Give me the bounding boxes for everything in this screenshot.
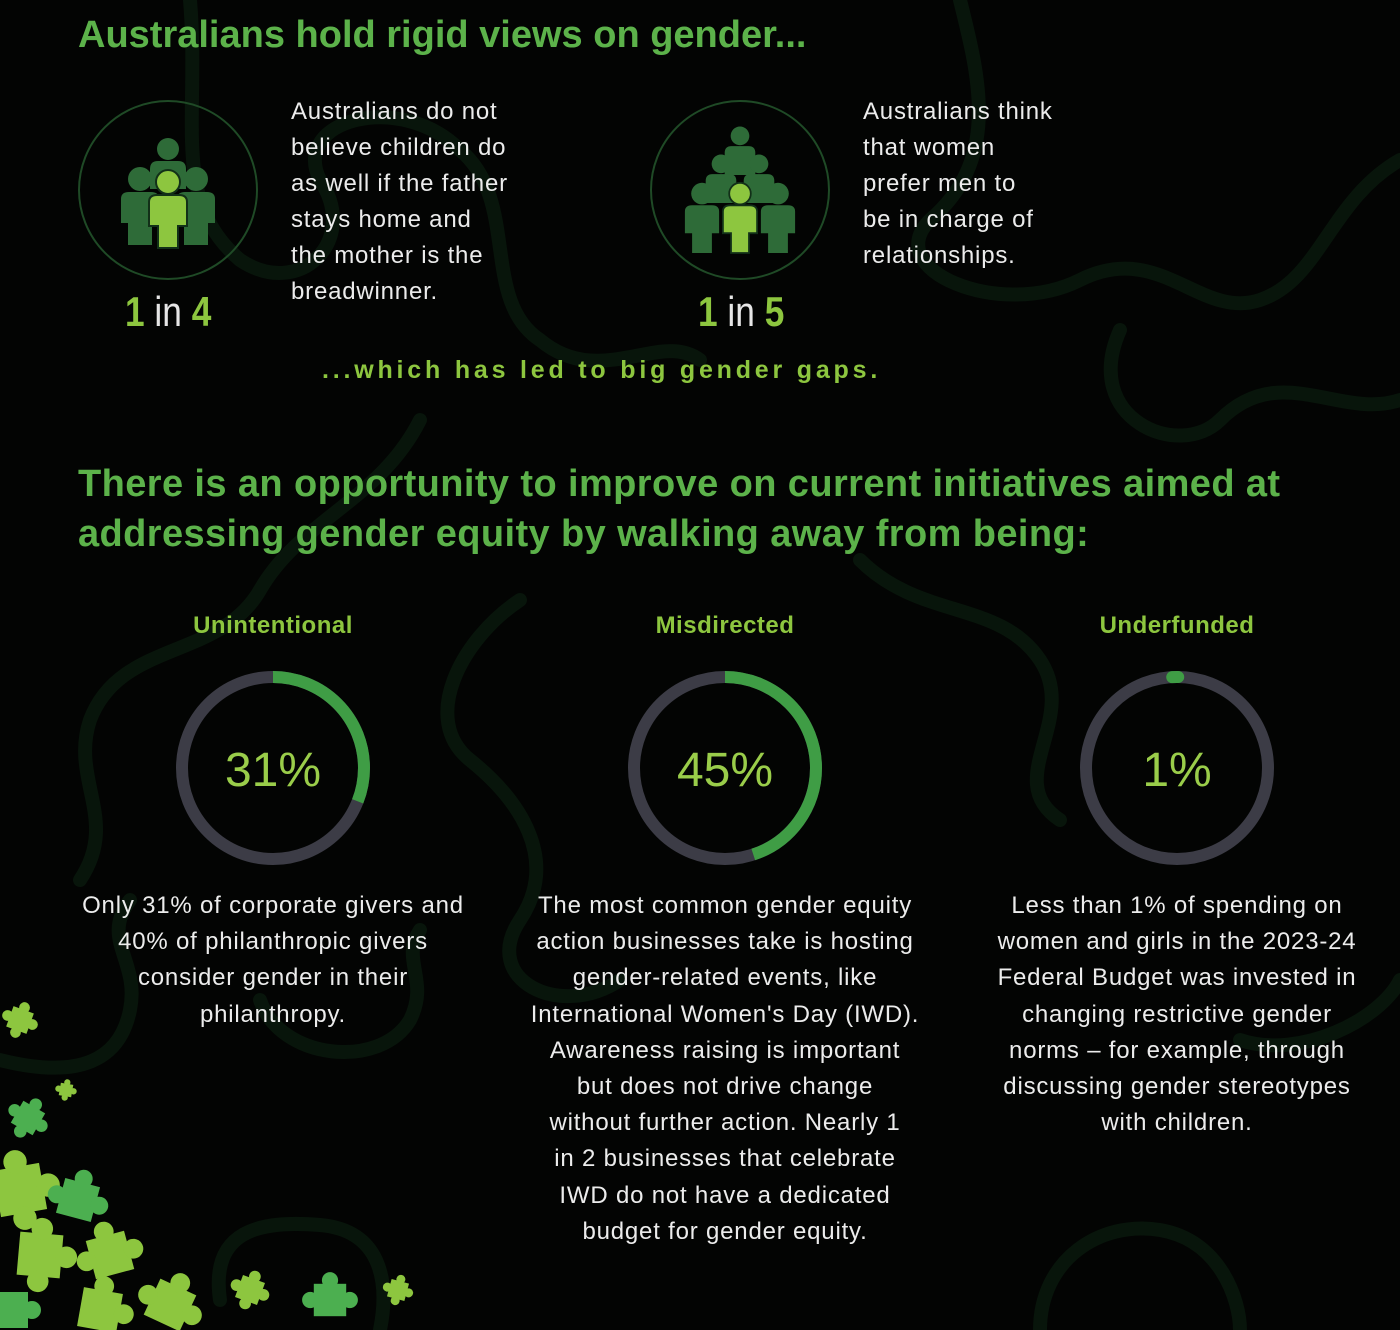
heading: opportunity — [78, 463, 1280, 555]
text: IWD events: The most common gender equity — [538, 892, 912, 919]
text: federal budget: norms – for example, through — [1009, 1037, 1345, 1064]
text: corporate givers: philanthropy. — [200, 1001, 346, 1028]
text: IWD events: gender-related events, like — [573, 964, 877, 991]
text: corporate givers: consider gender in their — [138, 964, 408, 991]
text: women prefer men — [863, 98, 1053, 269]
stat: 1 in 4: 1 in 4 — [125, 288, 211, 335]
text: corporate givers — [82, 892, 464, 1028]
text: federal budget: discussing gender stereotypes — [1003, 1073, 1351, 1100]
text: IWD events — [531, 892, 919, 1245]
icon: group of people 1 in 4 — [78, 100, 258, 280]
text: women prefer men: that women — [863, 134, 995, 161]
heading: opportunity: addressing gender equity by walking away from being: — [78, 513, 1089, 555]
stat: 1 in 5: 1 in 5 — [698, 288, 784, 335]
icon: pyramid of people 1 in 5 — [650, 100, 830, 280]
stat block: 1 in 5 — [650, 98, 1053, 335]
text: children belief: believe children do — [291, 134, 506, 161]
donut: 45% — [628, 671, 822, 865]
text: children belief: stays home and — [291, 206, 472, 233]
text: IWD events: but does not drive change — [577, 1073, 873, 1100]
text: federal budget: Federal Budget was invested in — [998, 964, 1356, 991]
text: women prefer men: Australians think — [863, 98, 1053, 125]
subheading: gender gaps: ...which has led to big gender gaps. — [322, 356, 881, 384]
donut: 45%: 45% — [677, 744, 773, 797]
text: federal budget: with children. — [1101, 1109, 1253, 1136]
text: children belief: as well if the father — [291, 170, 508, 197]
stat block: 1 in 4 — [78, 98, 508, 335]
text: federal budget: Less than 1% of spending on — [1011, 892, 1343, 919]
label: underfunded: Underfunded — [1100, 612, 1254, 639]
donut: 31% — [176, 671, 370, 865]
text: federal budget: changing restrictive gender — [1022, 1001, 1332, 1028]
heading: opportunity: There is an opportunity to improve on current initiatives aimed at — [78, 463, 1280, 505]
text: children belief: breadwinner. — [291, 278, 438, 305]
label: misdirected: Misdirected — [656, 612, 794, 639]
donut: 1%: 1% — [1142, 744, 1212, 797]
text: IWD events: Awareness raising is important — [550, 1037, 900, 1064]
panel: unintentional — [82, 612, 464, 1028]
title: Australians hold rigid views on gender... — [78, 14, 806, 56]
text: women prefer men: prefer men to — [863, 170, 1016, 197]
text: IWD events: IWD do not have a dedicated — [559, 1182, 891, 1209]
panel: misdirected — [531, 612, 919, 1245]
text: children belief: Australians do not — [291, 98, 498, 125]
text: IWD events: in 2 businesses that celebrate — [554, 1145, 896, 1172]
donut: 1% — [1080, 671, 1274, 865]
text: children belief: the mother is the — [291, 242, 483, 269]
panel: underfunded — [998, 612, 1356, 1136]
decoration: puzzle pieces — [0, 1002, 414, 1330]
text: IWD events: action businesses take is hosting — [536, 928, 914, 955]
text: federal budget — [998, 892, 1356, 1136]
text: corporate givers: 40% of philanthropic givers — [118, 928, 428, 955]
text: federal budget: women and girls in the 2023-24 — [998, 928, 1356, 955]
text: IWD events: without further action. Nearly 1 — [549, 1109, 901, 1136]
text: women prefer men: relationships. — [863, 242, 1016, 269]
text: children belief — [291, 98, 508, 305]
text: corporate givers: Only 31% of corporate givers and — [82, 892, 464, 919]
label: unintentional: Unintentional — [193, 612, 353, 639]
text: women prefer men: be in charge of — [863, 206, 1034, 233]
donut: 31%: 31% — [225, 744, 321, 797]
text: IWD events: International Women's Day (IWD). — [531, 1001, 919, 1028]
text: IWD events: budget for gender equity. — [582, 1218, 868, 1245]
